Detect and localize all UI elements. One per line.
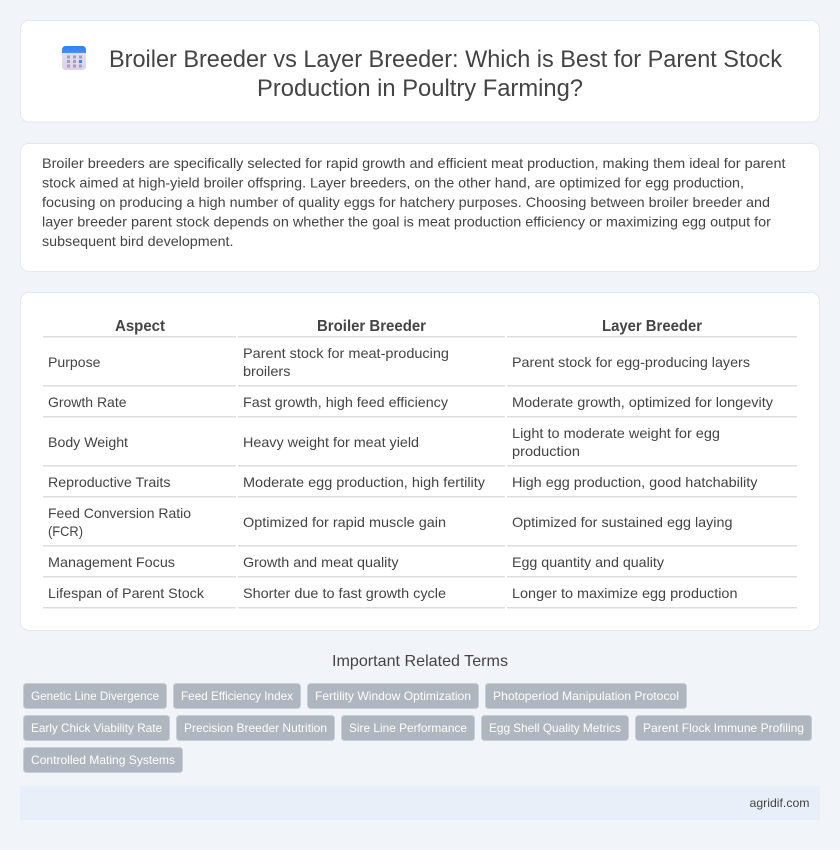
row: management focus: Management Focus xyxy=(48,554,175,570)
row: feed conversion ratio: Optimized for rapid muscle gain xyxy=(243,514,446,530)
tag: controlled mating systems xyxy=(24,748,182,772)
row: purpose: broilers xyxy=(243,363,290,379)
table header xyxy=(115,318,702,335)
tag: photoperiod manipulation protocol: Photoperiod Manipulation Protocol xyxy=(493,689,679,703)
title: Broiler Breeder vs Layer Breeder: Which is Best for Parent Stock xyxy=(109,46,783,73)
tag: early chick viability rate xyxy=(24,716,170,740)
tag: genetic line divergence: Genetic Line Divergence xyxy=(31,689,159,703)
row: body weight: Body Weight xyxy=(48,434,128,450)
row: purpose: Parent stock for meat-producing xyxy=(243,345,449,361)
row: reproductive traits: Moderate egg production, high fertility xyxy=(243,474,485,490)
tag: feed efficiency index xyxy=(174,684,300,708)
text block: introduction paragraph: Broiler breeders are specifically selected for rapid growth and efficient meat production, making them ideal for parent xyxy=(42,155,786,171)
tag: controlled mating systems: Controlled Mating Systems xyxy=(31,753,175,767)
row: body weight: Light to moderate weight for egg xyxy=(512,425,720,441)
tag: egg shell quality metrics: Egg Shell Quality Metrics xyxy=(489,721,621,735)
row: growth rate: Moderate growth, optimized for longevity xyxy=(512,394,773,410)
row: reproductive traits xyxy=(48,474,758,490)
row: feed conversion ratio: Feed Conversion Ratio xyxy=(48,505,191,521)
tag: feed efficiency index: Feed Efficiency Index xyxy=(181,689,293,703)
row: management focus: Growth and meat quality xyxy=(243,554,398,570)
row: body weight xyxy=(48,425,720,459)
row: purpose: Purpose xyxy=(48,354,101,370)
tag: photoperiod manipulation protocol xyxy=(486,684,686,708)
tag: parent flock immune profiling: Parent Flock Immune Profiling xyxy=(643,721,804,735)
row: feed conversion ratio: (FCR) xyxy=(48,523,83,539)
row: management focus: Egg quantity and quality xyxy=(512,554,664,570)
footer: agridif.com xyxy=(750,796,810,810)
table header: Broiler Breeder xyxy=(317,318,426,335)
row: feed conversion ratio: Optimized for sustained egg laying xyxy=(512,514,732,530)
row: lifespan of parent stock: Longer to maximize egg production xyxy=(512,585,738,601)
row: feed conversion ratio xyxy=(48,505,732,539)
row: growth rate: Fast growth, high feed efficiency xyxy=(243,394,448,410)
panel: comparison table xyxy=(20,292,820,630)
row: lifespan of parent stock: Lifespan of Parent Stock xyxy=(48,585,205,601)
text block: introduction paragraph: focusing on producing a high number of quality eggs for hatchery purposes. Choosing between broiler breeder and xyxy=(42,194,770,210)
row: reproductive traits: Reproductive Traits xyxy=(48,474,170,490)
table header: Aspect xyxy=(115,318,166,335)
row: body weight: production xyxy=(512,443,580,459)
row: growth rate xyxy=(48,394,773,410)
row: body weight: Heavy weight for meat yield xyxy=(243,434,419,450)
text block: introduction paragraph: subsequent bird development. xyxy=(42,233,234,249)
tag: fertility window optimization xyxy=(308,684,478,708)
icon: calendar xyxy=(62,46,86,70)
row: management focus xyxy=(48,554,664,570)
panel: introduction xyxy=(20,144,820,272)
text block: introduction paragraph xyxy=(42,155,786,249)
row: purpose: Parent stock for egg-producing layers xyxy=(512,354,750,370)
row: lifespan of parent stock xyxy=(48,585,738,601)
tag: fertility window optimization: Fertility Window Optimization xyxy=(315,689,471,703)
tag: egg shell quality metrics xyxy=(482,716,628,740)
heading: important related terms: Important Related Terms xyxy=(332,653,508,670)
tag: precision breeder nutrition: Precision Breeder Nutrition xyxy=(184,721,327,735)
tag: sire line performance: Sire Line Performance xyxy=(349,721,467,735)
panel: header xyxy=(20,20,820,122)
row: growth rate: Growth Rate xyxy=(48,394,127,410)
footer xyxy=(20,786,820,820)
tag: early chick viability rate: Early Chick Viability Rate xyxy=(31,721,162,735)
title xyxy=(109,46,783,102)
related term tags xyxy=(24,684,812,772)
row: lifespan of parent stock: Shorter due to fast growth cycle xyxy=(243,585,446,601)
row: purpose xyxy=(48,345,750,379)
row: reproductive traits: High egg production, good hatchability xyxy=(512,474,758,490)
tag: precision breeder nutrition xyxy=(176,716,334,740)
title: Production in Poultry Farming? xyxy=(257,75,583,102)
text block: introduction paragraph: stock aimed at high-yield broiler offspring. Layer breeders, on the other hand, are optimized for egg production, xyxy=(42,174,744,190)
text block: introduction paragraph: layer breeder parent stock depends on whether the goal is meat production efficiency or maximizing egg output for xyxy=(42,214,771,230)
tag: sire line performance xyxy=(342,716,474,740)
table header: Layer Breeder xyxy=(602,318,702,335)
tag: parent flock immune profiling xyxy=(636,716,812,740)
tag: genetic line divergence xyxy=(24,684,166,708)
